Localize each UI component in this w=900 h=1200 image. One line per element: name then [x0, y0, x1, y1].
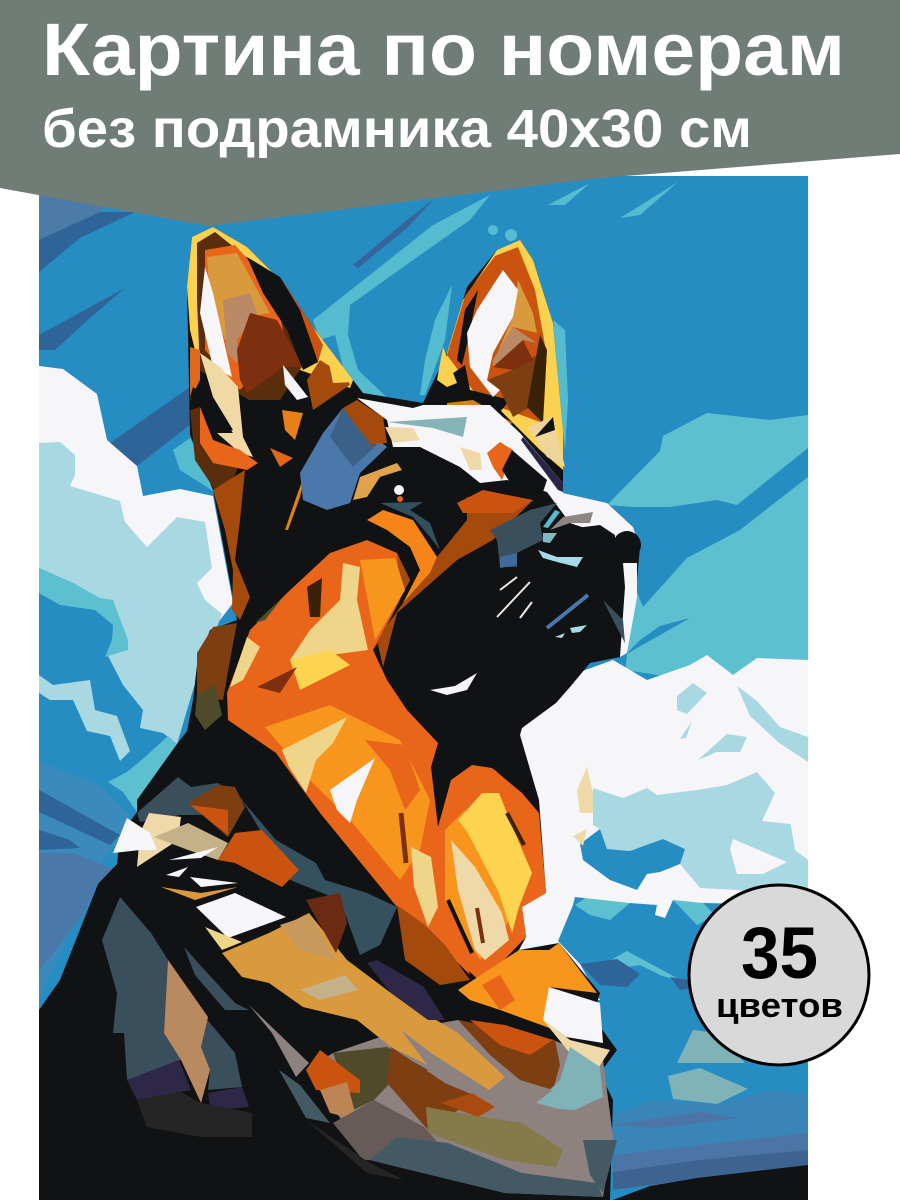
white blaze — [357, 398, 640, 547]
left ear — [187, 227, 353, 620]
painting: german shepherd — [39, 176, 808, 1200]
right ear — [423, 240, 565, 470]
dog silhouette — [39, 227, 640, 1200]
badge: 35 colours: 35 — [741, 913, 818, 994]
chest fur — [113, 777, 617, 1197]
left eye and brow — [353, 463, 402, 500]
brow and muzzle tan — [377, 497, 533, 667]
head — [300, 398, 641, 695]
forehead blue patch — [300, 408, 387, 510]
subtitle: без подрамника 40х30 см — [42, 99, 752, 159]
cheek and neck fur — [195, 540, 546, 983]
sky background — [39, 176, 808, 1200]
left clouds — [39, 366, 233, 1000]
nose and muzzle — [550, 512, 593, 530]
right clouds — [500, 655, 808, 1000]
header banner — [0, 0, 900, 226]
whiskers — [497, 577, 532, 618]
badge: 35 colours: цветов — [716, 987, 843, 1025]
mouth highlight — [430, 673, 477, 695]
shoulder shading — [102, 897, 252, 1137]
title: Картина по номерам — [42, 8, 845, 91]
badge: 35 colours — [689, 885, 869, 1065]
